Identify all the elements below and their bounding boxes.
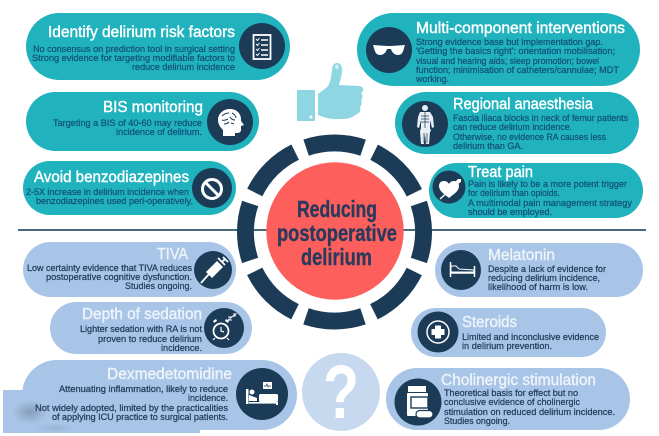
body text bbox=[27, 262, 192, 291]
body text: incidence. bbox=[161, 342, 202, 353]
panel: cholinergic stimulation bbox=[386, 368, 630, 430]
body text bbox=[415, 36, 619, 84]
image patch bbox=[3, 390, 200, 433]
title: delirium bbox=[301, 244, 372, 270]
body text bbox=[488, 263, 606, 292]
heading: Cholinergic stimulation bbox=[441, 372, 596, 389]
panel: steroids bbox=[411, 308, 606, 357]
body text: Theoretical basis for effect but no bbox=[444, 387, 578, 398]
icon: bed bbox=[441, 250, 481, 290]
body text: Low certainty evidence that TIVA reduces bbox=[27, 262, 192, 273]
body text: Limited and inconclusive evidence bbox=[462, 331, 599, 342]
red circle bbox=[266, 162, 404, 300]
icon: syringe bbox=[194, 251, 232, 289]
body text bbox=[53, 117, 202, 137]
panel: treat pain bbox=[429, 163, 643, 218]
icon: question mark: ? bbox=[323, 350, 359, 435]
heading: Treat pain bbox=[468, 164, 533, 181]
body text: A multimodal pain management strategy bbox=[468, 197, 632, 208]
body text: Lighter sedation with RA is not bbox=[80, 323, 202, 334]
icon: sunglasses bbox=[366, 27, 412, 73]
body text: 2-5X increase in delirium incidence when bbox=[26, 186, 189, 197]
heading: Steroids bbox=[462, 314, 517, 331]
panel: identify delirium risk factors bbox=[26, 13, 290, 80]
body text: stimulation on reduced delirium incidence. bbox=[444, 406, 615, 417]
body text: function; minimisation of catheters/cannulae; MDT bbox=[416, 64, 619, 75]
pill background bbox=[23, 161, 236, 215]
body text: 'Getting the basics right': orientation mobilisation; bbox=[416, 45, 615, 56]
icon: pill bottle bbox=[394, 378, 442, 426]
panel: melatonin bbox=[435, 243, 643, 297]
body text: can reduce delirium incidence. bbox=[453, 121, 572, 132]
body text bbox=[32, 43, 235, 72]
heading: TIVA bbox=[157, 246, 189, 263]
body text: for delirium than opioids. bbox=[468, 187, 560, 198]
title bbox=[277, 196, 397, 270]
body text: reduce delirium incidence bbox=[132, 61, 235, 72]
pill background bbox=[395, 92, 639, 154]
pill background bbox=[26, 13, 290, 80]
icon: checklist bbox=[239, 23, 285, 69]
panel: avoid benzodiazepines bbox=[23, 161, 236, 215]
icon: heart with arrow bbox=[432, 170, 466, 204]
pill background bbox=[23, 242, 236, 297]
body text: Despite a lack of evidence for bbox=[488, 263, 606, 274]
body text: proven to reduce delirium bbox=[98, 333, 202, 344]
pill background bbox=[435, 243, 643, 297]
body text: Studies ongoing. bbox=[444, 415, 510, 426]
pill background bbox=[50, 302, 252, 354]
heading: Depth of sedation bbox=[82, 306, 202, 323]
icon: question mark bbox=[302, 350, 380, 435]
heading: Avoid benzodiazepines bbox=[34, 169, 189, 186]
icon: thumbs up bbox=[297, 63, 363, 121]
body text: Otherwise, no evidence RA causes less bbox=[453, 131, 606, 142]
pill background bbox=[26, 92, 259, 151]
title: postoperative bbox=[277, 220, 397, 246]
body text bbox=[444, 387, 615, 426]
heading: Dexmedetomidine bbox=[107, 366, 232, 383]
pill background bbox=[429, 163, 643, 218]
pill background bbox=[386, 368, 630, 430]
body text: Not widely adopted, limited by the practicalities bbox=[35, 402, 228, 413]
body text: likelihood of harm is low. bbox=[488, 281, 588, 292]
body text: incidence of delirium. bbox=[116, 126, 202, 137]
icon: prohibited sign bbox=[192, 168, 232, 208]
body text: incidence. bbox=[188, 392, 228, 403]
body text: Targeting a BIS of 40-60 may reduce bbox=[53, 117, 202, 128]
body text bbox=[468, 178, 632, 217]
body text: of applying ICU practice to surgical patients. bbox=[52, 411, 228, 422]
body text: working. bbox=[415, 73, 449, 84]
heading: Regional anaesthesia bbox=[453, 96, 593, 113]
body text bbox=[453, 112, 628, 151]
body text bbox=[80, 323, 202, 353]
center graphic bbox=[222, 119, 447, 345]
icon: brain in head bbox=[207, 99, 253, 145]
heading: Identify delirium risk factors bbox=[48, 24, 235, 41]
pill background bbox=[357, 13, 640, 86]
body text: Strong evidence for targeting modifiable factors to bbox=[32, 52, 235, 63]
panel: depth of sedation bbox=[50, 302, 252, 354]
body text: should be employed. bbox=[468, 206, 552, 217]
pill background bbox=[411, 308, 606, 357]
body text bbox=[462, 331, 599, 351]
panel: BIS monitoring bbox=[26, 92, 259, 151]
body text: postoperative cognitive dysfunction. bbox=[46, 271, 192, 282]
heading: Melatonin bbox=[488, 247, 555, 264]
body text: Attenuating inflammation, likely to reduce bbox=[59, 383, 228, 394]
panel: TIVA bbox=[23, 242, 236, 297]
body text: in delirium prevention. bbox=[462, 340, 552, 351]
title: Reducing bbox=[297, 196, 377, 222]
body text bbox=[35, 383, 228, 422]
body text: reducing delirium incidence, bbox=[488, 272, 600, 283]
body text: Pain is likely to be a more potent trigger bbox=[468, 178, 627, 189]
body text: No consensus on prediction tool in surgical setting bbox=[33, 43, 235, 54]
panel: multi-component interventions bbox=[357, 13, 640, 86]
divider line bbox=[18, 229, 646, 231]
body text: Strong evidence base but implementation gap. bbox=[416, 36, 603, 47]
body text: Studies ongoing. bbox=[125, 280, 192, 291]
body text bbox=[26, 186, 193, 206]
pill background bbox=[22, 360, 297, 430]
panel: dexmedetomidine bbox=[3, 360, 297, 433]
segmented ring bbox=[222, 119, 447, 345]
panel: regional anaesthesia bbox=[395, 92, 639, 154]
body text: Fascia iliaca blocks in neck of femur patients bbox=[453, 112, 628, 123]
body text: delirium than GA. bbox=[453, 140, 523, 151]
icon: alarm clock bbox=[204, 308, 244, 348]
heading: Multi-component interventions bbox=[416, 20, 625, 37]
body text: visual and hearing aids; sleep promotion; bowel bbox=[416, 55, 599, 66]
icon: skeleton bbox=[402, 101, 448, 147]
icon: ICU bed bbox=[236, 368, 288, 420]
body text: benzodiazepines used peri-operatively. bbox=[36, 195, 193, 206]
body text: conclusive evidence of cholinergic bbox=[444, 396, 580, 407]
heading: BIS monitoring bbox=[103, 99, 203, 116]
icon: medical cross bbox=[418, 312, 458, 352]
